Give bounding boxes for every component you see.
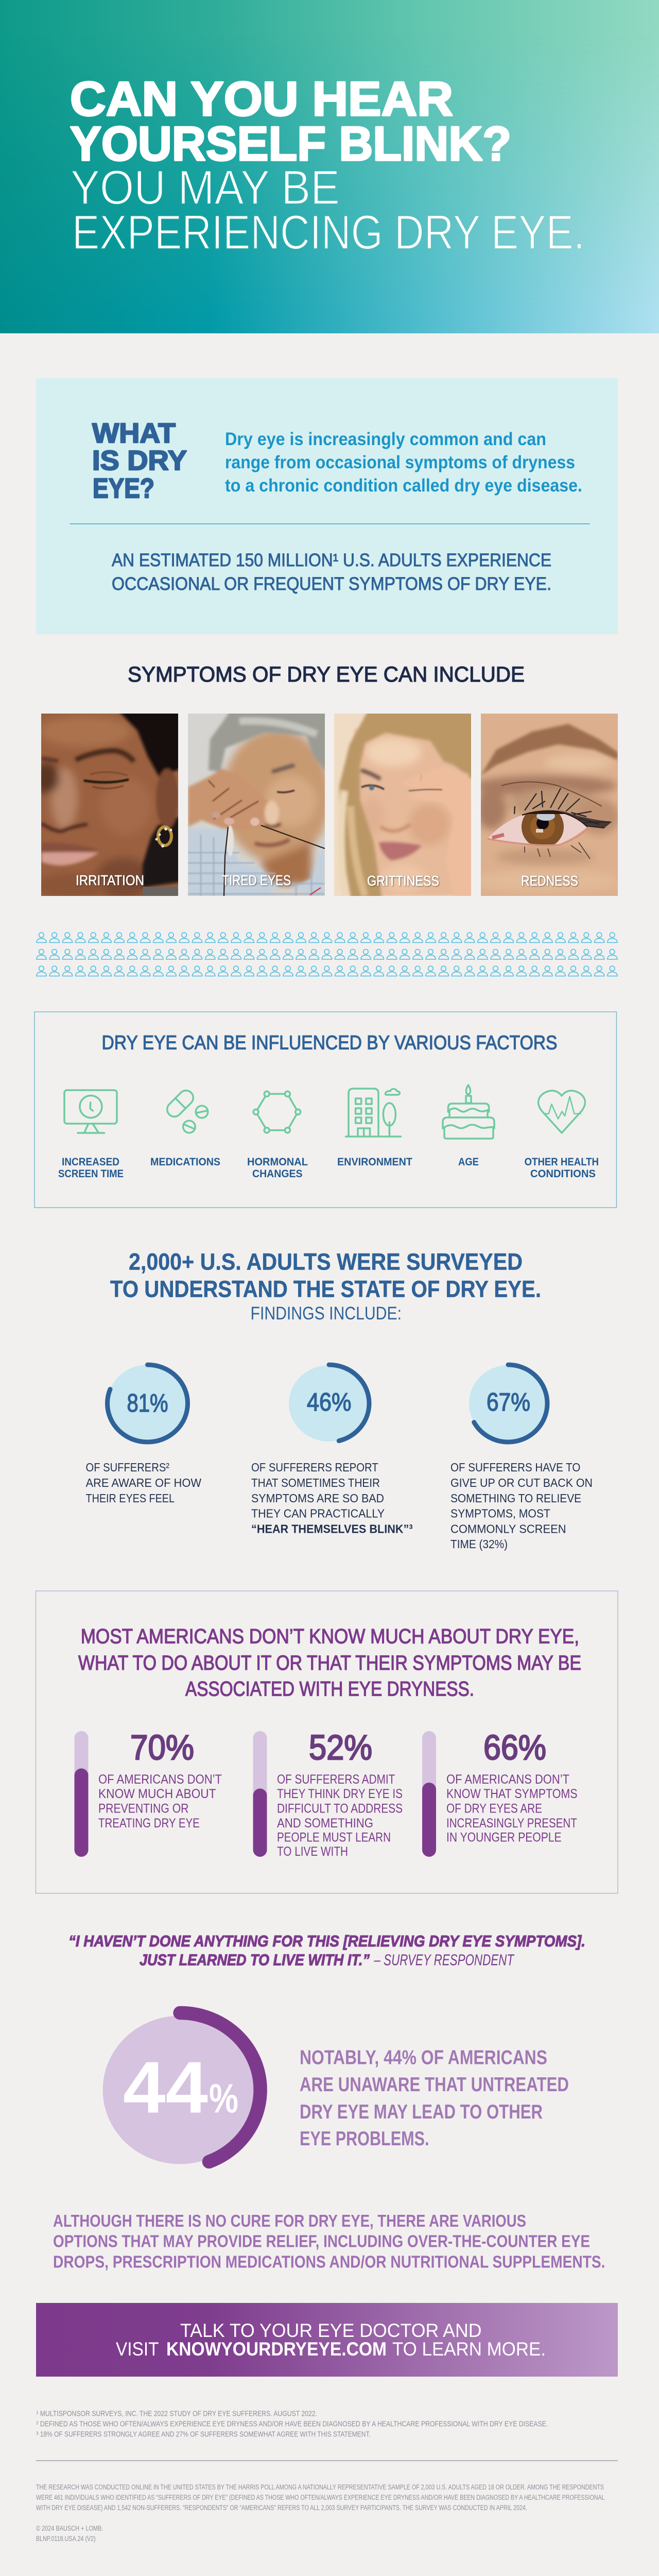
stat text (85, 1461, 201, 1505)
call to action banner: TALK TO YOUR EYE DOCTOR AND (180, 2320, 482, 2341)
stat text: SOMETHING TO RELIEVE (450, 1492, 581, 1505)
heading: factors: DRY EYE CAN BE INFLUENCED BY VARIOUS FACTORS (102, 1032, 557, 1054)
call to action banner: VISIT (116, 2338, 159, 2360)
definition text: to a chronic condition called dry eye disease. (225, 476, 582, 496)
footnotes: ³ 18% OF SUFFERERS STRONGLY AGREE AND 27% OF SUFFERERS SOMEWHAT AGREE WITH THIS STATEMENT. (36, 2431, 371, 2439)
heading: what is dry eye: EYE? (93, 473, 154, 504)
stat text: THEY THINK DRY EYE IS (277, 1787, 403, 1801)
text: relief options: ALTHOUGH THERE IS NO CURE FOR DRY EYE, THERE ARE VARIOUS (53, 2211, 526, 2230)
heading: awareness: ASSOCIATED WITH EYE DRYNESS. (185, 1677, 474, 1700)
quote: JUST LEARNED TO LIVE WITH IT.” (140, 1951, 370, 1969)
photo: redness (473, 714, 620, 896)
panel: what is dry eye (36, 378, 618, 634)
heading: what is dry eye: WHAT (92, 418, 176, 449)
label: increased screen time: INCREASED (62, 1156, 119, 1168)
heading: what is dry eye: IS DRY (92, 445, 187, 476)
label: environment: ENVIRONMENT (337, 1156, 412, 1168)
photo: grittiness (334, 709, 476, 900)
stat text: COMMONLY SCREEN (450, 1522, 566, 1535)
label: medications: MEDICATIONS (150, 1156, 220, 1168)
heading: symptoms: SYMPTOMS OF DRY EYE CAN INCLUDE (128, 662, 525, 686)
call to action banner (36, 2303, 618, 2377)
stat text (251, 1461, 413, 1535)
label: irritation: IRRITATION (76, 872, 144, 888)
label: increased screen time (58, 1156, 124, 1180)
heading: survey (110, 1249, 541, 1324)
stat text: KNOW THAT SYMPTOMS (446, 1787, 578, 1801)
statistic: 150 million adults: OCCASIONAL OR FREQUENT SYMPTOMS OF DRY EYE. (112, 574, 551, 594)
research methodology note: BLNP.0118.USA.24 (V2) (36, 2535, 96, 2543)
statistic: 150 million adults (112, 550, 551, 594)
stat bar: 52% (253, 1728, 403, 1859)
definition text: range from occasional symptoms of dryness (225, 452, 575, 472)
photo: tired eyes (188, 709, 331, 896)
stat: 46%: 46% (307, 1388, 351, 1416)
research methodology note: WITH DRY EYE DISEASE) AND 1,542 NON-SUFFERERS. “RESPONDENTS” OR “AMERICANS” REFERS TO ALL 2,003 SURVEY PARTICIPANTS. THE SURVEY WAS CONDUCTED IN APRIL 2024. (36, 2504, 527, 2512)
icon: environment (346, 1089, 401, 1137)
stat text: AND SOMETHING (277, 1816, 373, 1831)
title: YOU MAY BE (71, 160, 340, 214)
stat: 81%: 81% (127, 1389, 168, 1417)
quote: – SURVEY RESPONDENT (374, 1951, 514, 1969)
stat text: TREATING DRY EYE (98, 1816, 200, 1831)
stat text: GIVE UP OR CUT BACK ON (450, 1476, 593, 1489)
label: age: AGE (458, 1156, 479, 1168)
stat text (98, 1772, 222, 1831)
label: hormonal changes (247, 1156, 308, 1180)
panel: factors (34, 1012, 617, 1208)
stat bar: 52%: 52% (309, 1728, 372, 1767)
stat text: INCREASINGLY PRESENT (446, 1816, 577, 1831)
icon: hormonal changes (253, 1091, 301, 1133)
definition text: Dry eye is increasingly common and can (225, 429, 546, 449)
title: CAN YOU HEAR (70, 72, 453, 126)
stat text: KNOW MUCH ABOUT (98, 1787, 216, 1801)
stat text: THAT SOMETIMES THEIR (251, 1476, 380, 1489)
stat text: “HEAR THEMSELVES BLINK”³ (251, 1522, 413, 1535)
stat: 81% (85, 1365, 201, 1505)
stat text (277, 1772, 403, 1859)
stat text: THEIR EYES FEEL (85, 1492, 175, 1505)
statistic: 150 million adults: AN ESTIMATED 150 MILLION¹ U.S. ADULTS EXPERIENCE (112, 550, 551, 570)
chart: 44% donut: % (209, 2075, 238, 2122)
stat text: SYMPTOMS, MOST (450, 1506, 550, 1520)
stat: 67%: 67% (487, 1388, 530, 1416)
quote: “I HAVEN’T DONE ANYTHING FOR THIS [RELIEVING DRY EYE SYMPTOMS]. (68, 1932, 585, 1950)
stat text: OF SUFFERERS REPORT (251, 1461, 378, 1474)
stat text: OF SUFFERERS HAVE TO (450, 1461, 580, 1474)
icon: medications (164, 1088, 208, 1133)
chart: 44% donut (100, 2013, 261, 2167)
stat text: OF SUFFERERS² (85, 1461, 169, 1474)
text: 44% unaware: NOTABLY, 44% OF AMERICANS (300, 2046, 547, 2069)
quote (68, 1932, 585, 1969)
call to action banner: KNOWYOURDRYEYE.COM (166, 2338, 387, 2360)
icon: screen time (64, 1090, 117, 1133)
label: other health conditions: OTHER HEALTH (525, 1156, 599, 1168)
label: other health conditions (525, 1156, 599, 1180)
stat text: OF SUFFERERS ADMIT (277, 1772, 395, 1787)
stat text: TIME (32%) (450, 1537, 508, 1551)
label: hormonal changes: CHANGES (252, 1168, 303, 1180)
text: 44% unaware: EYE PROBLEMS. (300, 2128, 429, 2150)
stat text: TO LIVE WITH (277, 1844, 348, 1859)
chart: 44% donut: 44 (123, 2046, 208, 2129)
stat text: PREVENTING OR (98, 1801, 188, 1816)
header banner (0, 0, 659, 333)
stat bar: 70% (74, 1728, 222, 1857)
stat text: THEY CAN PRACTICALLY (251, 1506, 385, 1520)
heading: awareness (78, 1625, 581, 1700)
label: other health conditions: CONDITIONS (530, 1168, 596, 1180)
stat bar: 70%: 70% (130, 1728, 194, 1767)
heading: survey: FINDINGS INCLUDE: (250, 1303, 402, 1324)
icon: age cake (443, 1085, 494, 1139)
text: 44% unaware: DRY EYE MAY LEAD TO OTHER (300, 2101, 543, 2123)
photo: irritation (41, 714, 178, 896)
label: grittiness: GRITTINESS (367, 873, 439, 889)
title (70, 72, 585, 259)
footnotes: ¹ MULTISPONSOR SURVEYS, INC. THE 2022 STUDY OF DRY EYE SUFFERERS. AUGUST 2022. (36, 2410, 317, 2418)
title: YOURSELF BLINK? (70, 116, 511, 171)
heading: survey: 2,000+ U.S. ADULTS WERE SURVEYED (129, 1249, 523, 1275)
stat text: DIFFICULT TO ADDRESS (277, 1801, 403, 1816)
stat text: OF AMERICANS DON’T (98, 1772, 222, 1787)
heading: awareness: WHAT TO DO ABOUT IT OR THAT THEIR SYMPTOMS MAY BE (78, 1652, 581, 1674)
stat text: IN YOUNGER PEOPLE (446, 1830, 562, 1844)
panel: americans awareness (36, 1591, 618, 1893)
stat text: OF AMERICANS DON’T (446, 1772, 569, 1787)
stat text (446, 1772, 578, 1844)
footnotes (36, 2410, 548, 2439)
stat text: OF DRY EYES ARE (446, 1801, 542, 1816)
heading: what is dry eye (92, 418, 187, 504)
stat text: SYMPTOMS ARE SO BAD (251, 1492, 384, 1505)
heading: survey: TO UNDERSTAND THE STATE OF DRY EYE. (110, 1276, 541, 1302)
research methodology note (36, 2483, 605, 2543)
label: redness: REDNESS (521, 873, 578, 889)
definition text (225, 429, 582, 496)
label: increased screen time: SCREEN TIME (58, 1168, 124, 1180)
call to action banner: TO LEARN MORE. (392, 2338, 546, 2360)
title: EXPERIENCING DRY EYE. (72, 205, 585, 259)
stat: 46% (251, 1365, 413, 1535)
label: tired eyes: TIRED EYES (222, 872, 291, 888)
text: relief options (53, 2211, 605, 2271)
stat: 67% (450, 1365, 593, 1551)
stat text: PEOPLE MUST LEARN (277, 1830, 391, 1844)
stat bar: 66%: 66% (483, 1728, 546, 1767)
stat text: ARE AWARE OF HOW (85, 1476, 201, 1489)
icon grid: rows of people (36, 932, 620, 982)
footnotes: ² DEFINED AS THOSE WHO OFTEN/ALWAYS EXPERIENCE EYE DRYNESS AND/OR HAVE BEEN DIAGNOSED BY A HEALTHCARE PROFESSIONAL WITH DRY EYE DISEASE. (36, 2420, 548, 2429)
stat text (450, 1461, 593, 1551)
stat bar: 66% (422, 1728, 578, 1857)
research methodology note: © 2024 BAUSCH + LOMB. (36, 2524, 103, 2532)
text: 44% unaware: ARE UNAWARE THAT UNTREATED (300, 2074, 569, 2096)
text: 44% unaware (300, 2046, 569, 2150)
heading: awareness: MOST AMERICANS DON’T KNOW MUCH ABOUT DRY EYE, (81, 1625, 579, 1648)
label: hormonal changes: HORMONAL (247, 1156, 308, 1168)
icon: health heart (539, 1091, 585, 1133)
